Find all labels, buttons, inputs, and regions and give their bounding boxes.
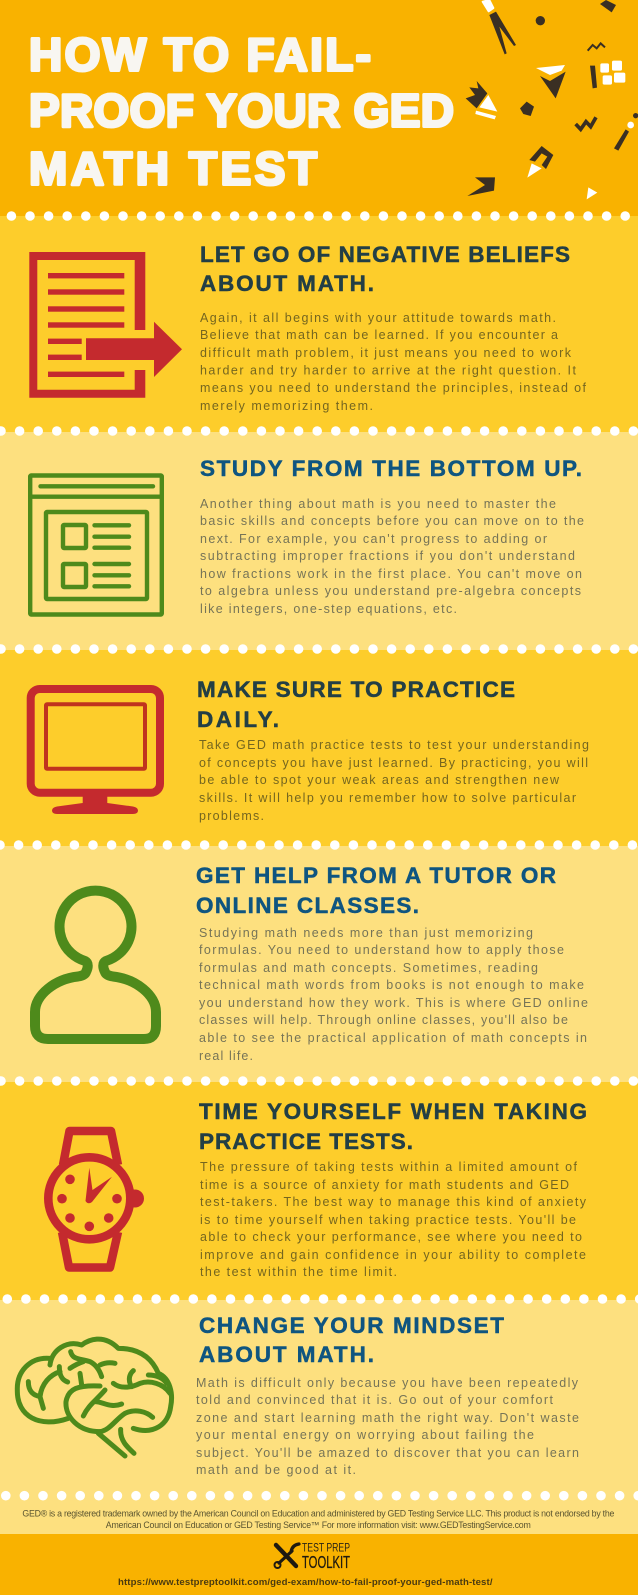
icon: web page layout [30, 476, 162, 614]
text: tutor: formulas. You need to understand how to apply those [199, 943, 564, 957]
panel background: study [0, 432, 638, 650]
text: mindset: math and be good at it. [196, 1463, 356, 1477]
logo: Test Prep Toolkit: TEST PREP [302, 1541, 350, 1555]
heading: study: STUDY FROM THE BOTTOM UP. [200, 456, 582, 481]
text: mindset: your mental energy on worrying about failing the [196, 1428, 534, 1442]
text: negative beliefs: Believe that math can be learned. If you encounter a [200, 328, 558, 342]
heading: practice: DAILY. [197, 707, 279, 732]
heading: negative beliefs [200, 242, 570, 296]
icon: document with arrow [29, 252, 182, 398]
disclaimer [22, 1509, 614, 1530]
heading: mindset [199, 1313, 504, 1367]
heading: mindset: CHANGE YOUR MINDSET [199, 1313, 504, 1338]
text: practice: be able to spot your weak areas and strengthen new [199, 773, 560, 787]
title: MATH TEST [29, 142, 317, 194]
source url: https://www.testpreptoolkit.com/ged-exam/how-to-fail-proof-your-ged-math-test/ [118, 1577, 493, 1588]
heading: time [199, 1099, 587, 1154]
text: time: is to time yourself when taking practice tests. You'll be [200, 1213, 576, 1227]
text: time: time is a source of anxiety for math students and GED [200, 1178, 569, 1192]
text: time: able to check your performance, see where you need to [200, 1230, 582, 1244]
text: time: the test within the time limit. [200, 1265, 397, 1279]
title: HOW TO FAIL- [29, 28, 371, 80]
heading: tutor: ONLINE CLASSES. [196, 893, 419, 918]
text: time: test-takers. The best way to manage this kind of anxiety [200, 1195, 587, 1209]
disclaimer: GED® is a registered trademark owned by the American Council on Education and administered by GED Testing Service LLC. This product is not endorsed by the [22, 1509, 614, 1519]
text: study: how fractions work in the first place. You can't move on [200, 567, 582, 581]
text: tutor: real life. [199, 1049, 253, 1063]
text: practice: problems. [199, 809, 264, 823]
text: mindset: subject. You'll be amazed to discover that you can learn [196, 1446, 579, 1460]
text: study: Another thing about math is you need to master the [200, 497, 556, 511]
title [29, 28, 454, 194]
disclaimer: American Council on Education or GED Testing Service™ For more information visit: www.GEDTestingService.com [106, 1520, 531, 1530]
text: mindset [196, 1376, 579, 1477]
icon: wristwatch [48, 1131, 144, 1268]
text: practice [199, 738, 589, 823]
heading: tutor: GET HELP FROM A TUTOR OR [196, 863, 556, 888]
text: study: basic skills and concepts before you can move on to the [200, 514, 584, 528]
text: mindset: zone and start learning math the right way. Don't waste [196, 1411, 579, 1425]
text: negative beliefs: difficult math problem, it just means you need to work [200, 346, 572, 360]
icon: person [35, 891, 156, 1039]
heading: practice: MAKE SURE TO PRACTICE [197, 677, 515, 702]
panel background: beliefs [0, 216, 638, 432]
text: study: to algebra unless you understand pre-algebra concepts [200, 584, 581, 598]
icon: brain [17, 1339, 172, 1456]
text: study: subtracting improper fractions if you don't understand [200, 549, 575, 563]
text: tutor: Studying math needs more than just memorizing [199, 926, 533, 940]
title: PROOF YOUR GED [29, 84, 454, 136]
panel background: practice [0, 650, 638, 846]
text: tutor: classes will help. Through online classes, you'll also be [199, 1013, 568, 1027]
text: mindset: told and convinced that it is. Go out of your comfort [196, 1393, 554, 1407]
header decorative shapes [466, 0, 638, 199]
logo: Test Prep Toolkit: TOOLKIT [302, 1552, 350, 1572]
text: practice: Take GED math practice tests to test your understanding [199, 738, 589, 752]
text: tutor: technical math words from books is not enough to make [199, 978, 584, 992]
text: negative beliefs [200, 311, 587, 413]
icon: computer monitor [31, 689, 160, 814]
text: negative beliefs: means you need to understand the principles, instead of [200, 381, 587, 395]
text: practice: of concepts you have just learned. By practicing, you will [199, 756, 588, 770]
panel background: mindset [0, 1300, 638, 1534]
heading: time: TIME YOURSELF WHEN TAKING [199, 1099, 587, 1124]
text: tutor: able to see the practical application of math concepts in [199, 1031, 587, 1045]
text: tutor: formulas and math concepts. Sometimes, reading [199, 961, 538, 975]
text: mindset: Math is difficult only because you have been repeatedly [196, 1376, 579, 1390]
heading: mindset: ABOUT MATH. [199, 1342, 374, 1367]
header background [0, 0, 638, 217]
text: negative beliefs: harder and try harder to arrive at the right question. It [200, 364, 577, 378]
text: time: The pressure of taking tests within a limited amount of [200, 1160, 578, 1174]
text: negative beliefs: Again, it all begins with your attitude towards math. [200, 311, 556, 325]
text: practice: skills. It will help you remember how to solve particular [199, 791, 576, 805]
text: tutor [199, 926, 588, 1063]
icon: crossed tools [274, 1544, 299, 1568]
text: study: next. For example, you can't progress to adding or [200, 532, 547, 546]
text: time: improve and gain confidence in your ability to complete [200, 1248, 586, 1262]
text: time [200, 1160, 587, 1279]
panel background: tutor [0, 846, 638, 1082]
heading: tutor [196, 863, 556, 918]
footer background [0, 1534, 638, 1595]
text: tutor: you understand how they work. This is where GED online [199, 996, 588, 1010]
panel background: time [0, 1082, 638, 1300]
heading: time: PRACTICE TESTS. [199, 1129, 413, 1154]
heading: negative beliefs: LET GO OF NEGATIVE BELIEFS [200, 242, 570, 267]
text: study [200, 497, 584, 616]
text: study: like integers, one-step equations, etc. [200, 602, 457, 616]
heading: negative beliefs: ABOUT MATH. [200, 271, 374, 296]
text: negative beliefs: merely memorizing them. [200, 399, 373, 413]
logo: Test Prep Toolkit [274, 1541, 350, 1572]
heading: practice [197, 677, 515, 732]
